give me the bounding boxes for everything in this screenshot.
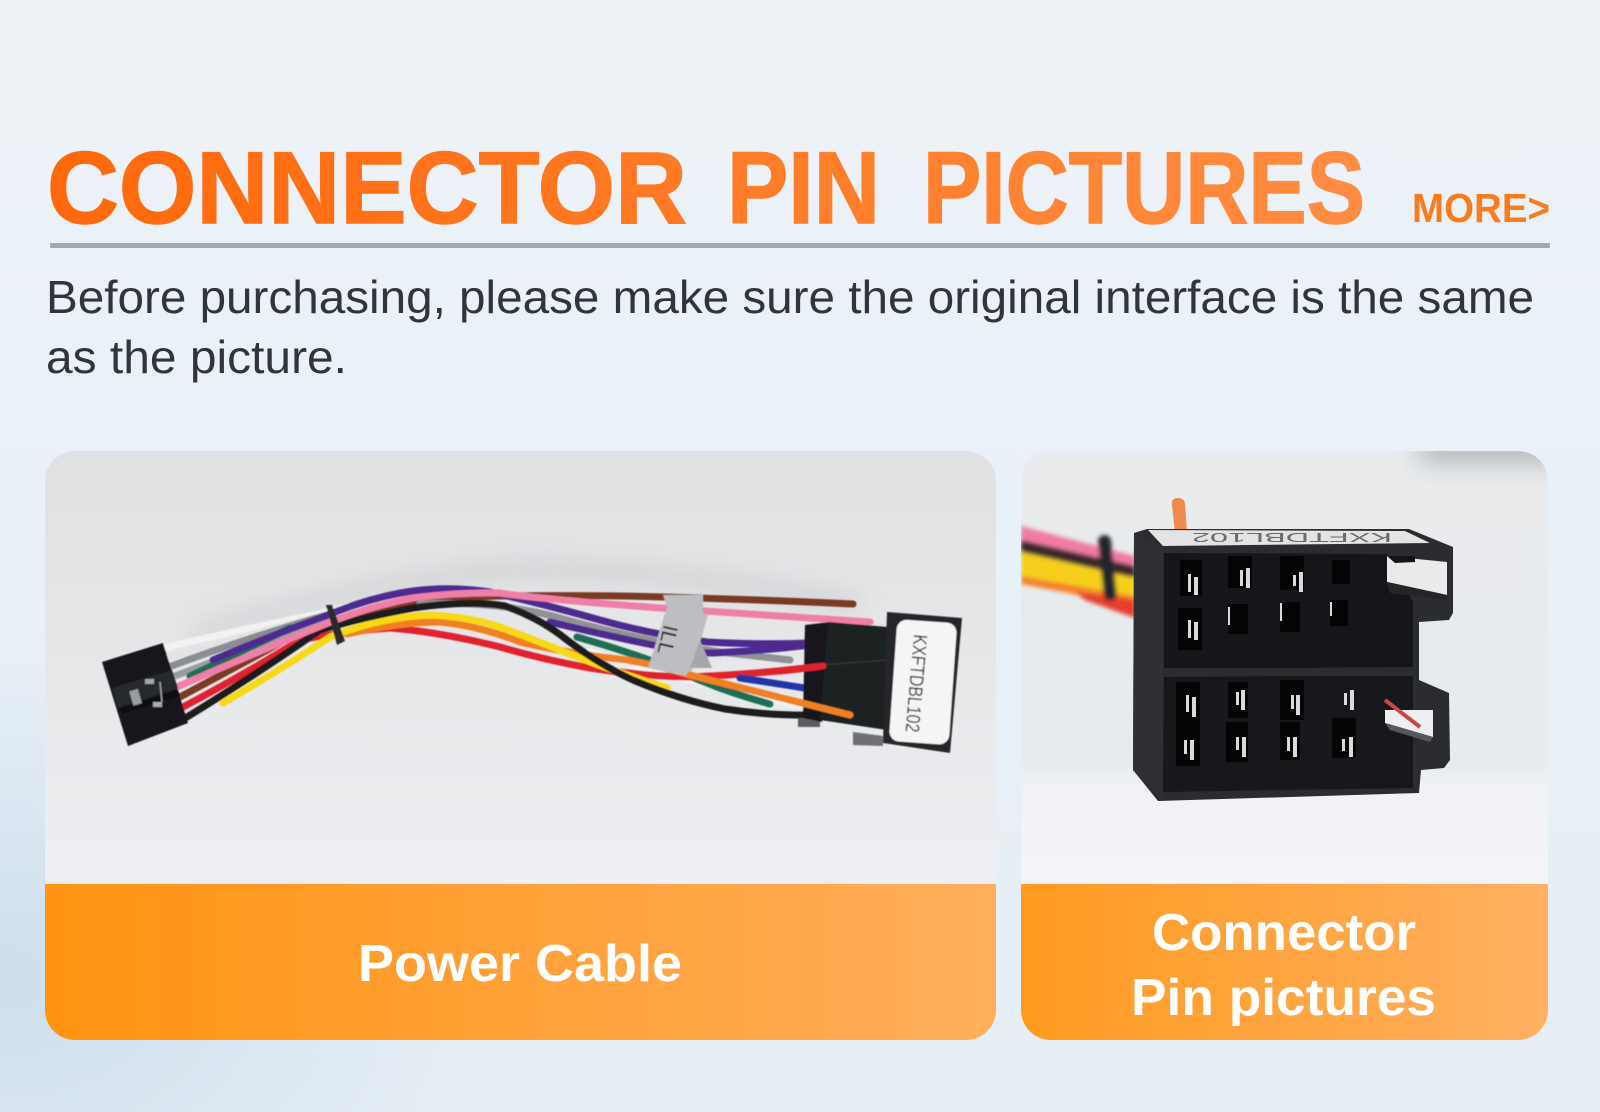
connector body: [1133, 529, 1453, 801]
description text: [46, 271, 1534, 383]
more link: MORE>: [1412, 185, 1550, 231]
tape label ILL: ILL: [653, 623, 682, 657]
wire shadow: [190, 569, 860, 635]
blurred wires: [1021, 526, 1135, 618]
orange stub wire: [1172, 498, 1187, 532]
tape label ILL: [648, 595, 712, 677]
title: PICTURES: [923, 131, 1365, 245]
description text: Before purchasing, please make sure the original interface is the same: [46, 271, 1534, 323]
panel: connector pin pictures: [1021, 435, 1560, 1040]
title: PIN: [727, 131, 880, 245]
wires: [102, 589, 962, 753]
connector: left: [102, 643, 188, 746]
caption bar: connector pin pictures: Pin pictures: [1131, 969, 1436, 1027]
pin blocks: [1176, 556, 1356, 766]
orange wire emerging from tape: [686, 671, 804, 707]
title: CONNECTOR: [47, 131, 687, 245]
caption bar: power cable: [45, 884, 996, 1040]
photo: connector front: [1021, 435, 1560, 884]
photo: power cable harness: [45, 451, 996, 884]
upper socket: [1164, 553, 1413, 669]
connector: right: KXFTDBL102: [900, 634, 931, 733]
cable tie: [326, 605, 345, 645]
title: [47, 131, 1365, 245]
caption bar: connector pin pictures: Connector: [1152, 904, 1416, 962]
caption bar: connector pin pictures: [1021, 884, 1548, 1040]
pins: [1184, 568, 1354, 760]
description text: as the picture.: [46, 331, 347, 383]
caption bar: power cable: Power Cable: [358, 935, 682, 993]
latch windows: [1387, 556, 1447, 595]
connector: right: [780, 612, 962, 753]
panel: power cable: [45, 451, 996, 1040]
lower socket: [1163, 675, 1413, 792]
connector body: KXFTDBL102: [1192, 530, 1392, 545]
